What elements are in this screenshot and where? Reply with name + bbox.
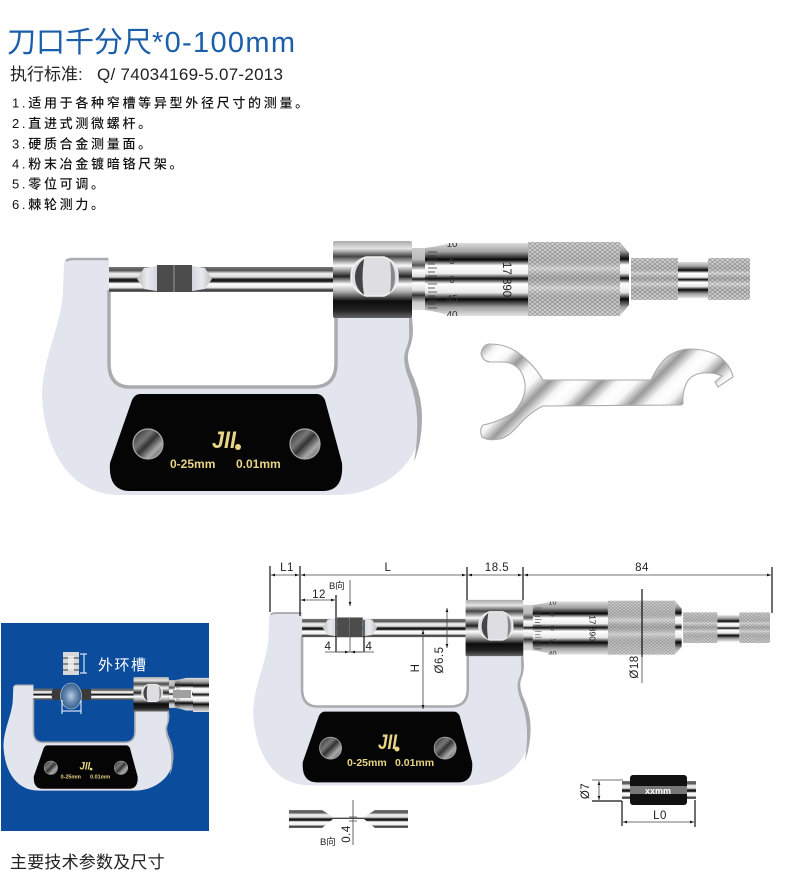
gauge block with L0 and diameter 7: xxmm [645,786,671,796]
ring groove icon [63,652,87,675]
dimension lines: B向 [329,580,345,592]
feature list: 2.直进式测微螺杆。 [12,116,154,131]
main micrometer: 10 [446,239,458,250]
dimensioned micrometer: 0 [550,624,554,633]
section heading: 主要技术参数及尺寸 [10,853,165,872]
ring width bracket [62,700,81,714]
dimension lines: 84 [635,562,649,574]
main micrometer: 45 [446,294,458,305]
micrometer on ring groove: 0-25mm [61,774,81,780]
standard line: 执行标准: [10,65,83,84]
dimension lines: Ø6.5 [434,647,446,673]
main micrometer: 0-25mm [170,457,215,471]
main micrometer: 17 890 [500,262,512,297]
main micrometer: 0.01mm [236,457,281,471]
feature list [12,96,311,212]
feature list: 3.硬质合金测量面。 [12,136,154,152]
wrench [481,344,733,440]
dimension lines [270,562,772,709]
feature list: 4.粉末冶金镀暗铬尺架。 [12,156,185,172]
dimensioned micrometer: 17 890 [588,615,598,641]
ring label: 外环槽 [98,657,148,674]
B-direction blade detail: B向 [320,836,336,848]
title: 刀口千分尺 [7,27,152,59]
gauge block with L0 and diameter 7: L0 [653,810,667,822]
title: *0-100mm [152,27,295,59]
micrometer on ring groove: 0.01mm [90,774,110,780]
feature list: 1.适用于各种窄槽等异型外径尺寸的测量。 [12,96,311,110]
dimension lines: H [410,664,422,672]
feature list: 5.零位可调。 [12,176,107,192]
dimensioned micrometer [253,597,770,785]
dimension lines: L1 [280,562,294,574]
dimension lines: 4 [366,641,373,653]
dimension lines: 18.5 [485,562,509,574]
dimensioned micrometer: 0.01mm [395,757,434,769]
dimensioned micrometer: 40 [548,649,557,658]
B-direction blade detail: 0.4 [341,825,353,843]
dimensioned micrometer: 0-25mm [347,757,387,769]
dimension lines: 4 [325,641,332,653]
main micrometer [42,239,750,495]
dimensioned micrometer: 10 [548,597,557,606]
dimension lines: L [385,562,392,574]
main micrometer: 5 [449,256,455,267]
blue application panel [1,623,209,831]
dimensioned micrometer: 45 [548,637,557,646]
dimensioned micrometer: JII [378,731,398,754]
standard line: Q/ 74034169-5.07-2013 [97,65,283,84]
main micrometer: 40 [446,310,458,321]
ring workpiece [60,683,82,709]
B-direction blade detail [289,800,408,848]
main micrometer: JII [212,427,237,454]
gauge block with L0 and diameter 7 [580,775,696,827]
micrometer on ring groove [3,677,209,791]
dimension lines: 12 [312,589,326,601]
feature list: 6.棘轮测力。 [12,197,107,212]
dimension lines: Ø18 [629,655,641,679]
micrometer on ring groove: JII [79,761,91,773]
main micrometer: 0 [449,275,455,286]
dimensioned micrometer: 5 [550,610,554,619]
gauge block with L0 and diameter 7: Ø7 [580,783,592,799]
